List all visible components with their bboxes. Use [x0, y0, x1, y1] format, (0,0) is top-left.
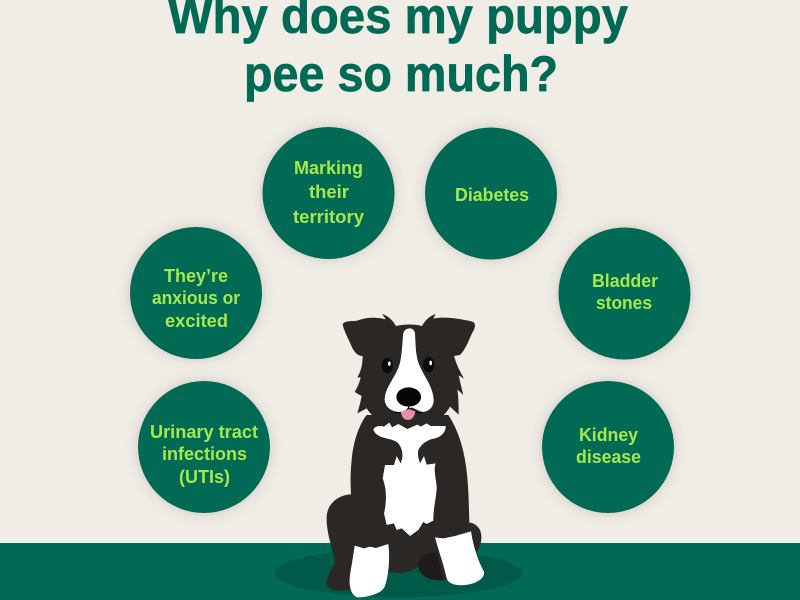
cause: bladder stones: stones	[596, 293, 652, 313]
cause: urinary tract infections	[138, 381, 270, 513]
cause: urinary tract infections: (UTIs)	[179, 467, 230, 487]
cause: marking their territory: territory	[293, 207, 364, 227]
cause: anxious or excited: anxious or	[152, 288, 240, 308]
cause: urinary tract infections: infections	[162, 444, 247, 464]
cause: diabetes	[425, 128, 557, 260]
cause: anxious or excited: They’re	[164, 266, 228, 286]
nose and mouth	[395, 387, 423, 413]
puppy illustration	[327, 314, 484, 597]
cause: kidney disease: Kidney	[579, 425, 638, 445]
green ground band	[0, 543, 800, 600]
back haunch and body	[327, 415, 481, 591]
cause: marking their territory: their	[309, 182, 349, 202]
title	[168, 0, 628, 102]
rear paw shadow	[418, 553, 443, 580]
front leg left white sock	[350, 544, 389, 597]
front leg right white sock	[435, 531, 484, 585]
eyes	[382, 357, 434, 373]
tongue	[401, 409, 415, 420]
cause: urinary tract infections: Urinary tract	[150, 422, 258, 442]
cause: kidney disease: disease	[576, 447, 641, 467]
cause: bladder stones: Bladder	[592, 271, 658, 291]
cause: marking their territory: Marking	[294, 158, 363, 178]
cause: kidney disease	[542, 381, 674, 513]
cause: anxious or excited: excited	[165, 311, 228, 331]
title: pee so much?	[244, 46, 558, 102]
cause: diabetes: Diabetes	[455, 185, 529, 205]
cause: marking their territory	[262, 127, 394, 259]
white chest collar	[373, 423, 446, 536]
head with ears and fur	[343, 314, 475, 429]
floor shadow under puppy	[274, 549, 522, 597]
white face blaze	[385, 328, 434, 412]
cause: bladder stones	[558, 228, 690, 360]
cause: anxious or excited	[130, 227, 262, 359]
